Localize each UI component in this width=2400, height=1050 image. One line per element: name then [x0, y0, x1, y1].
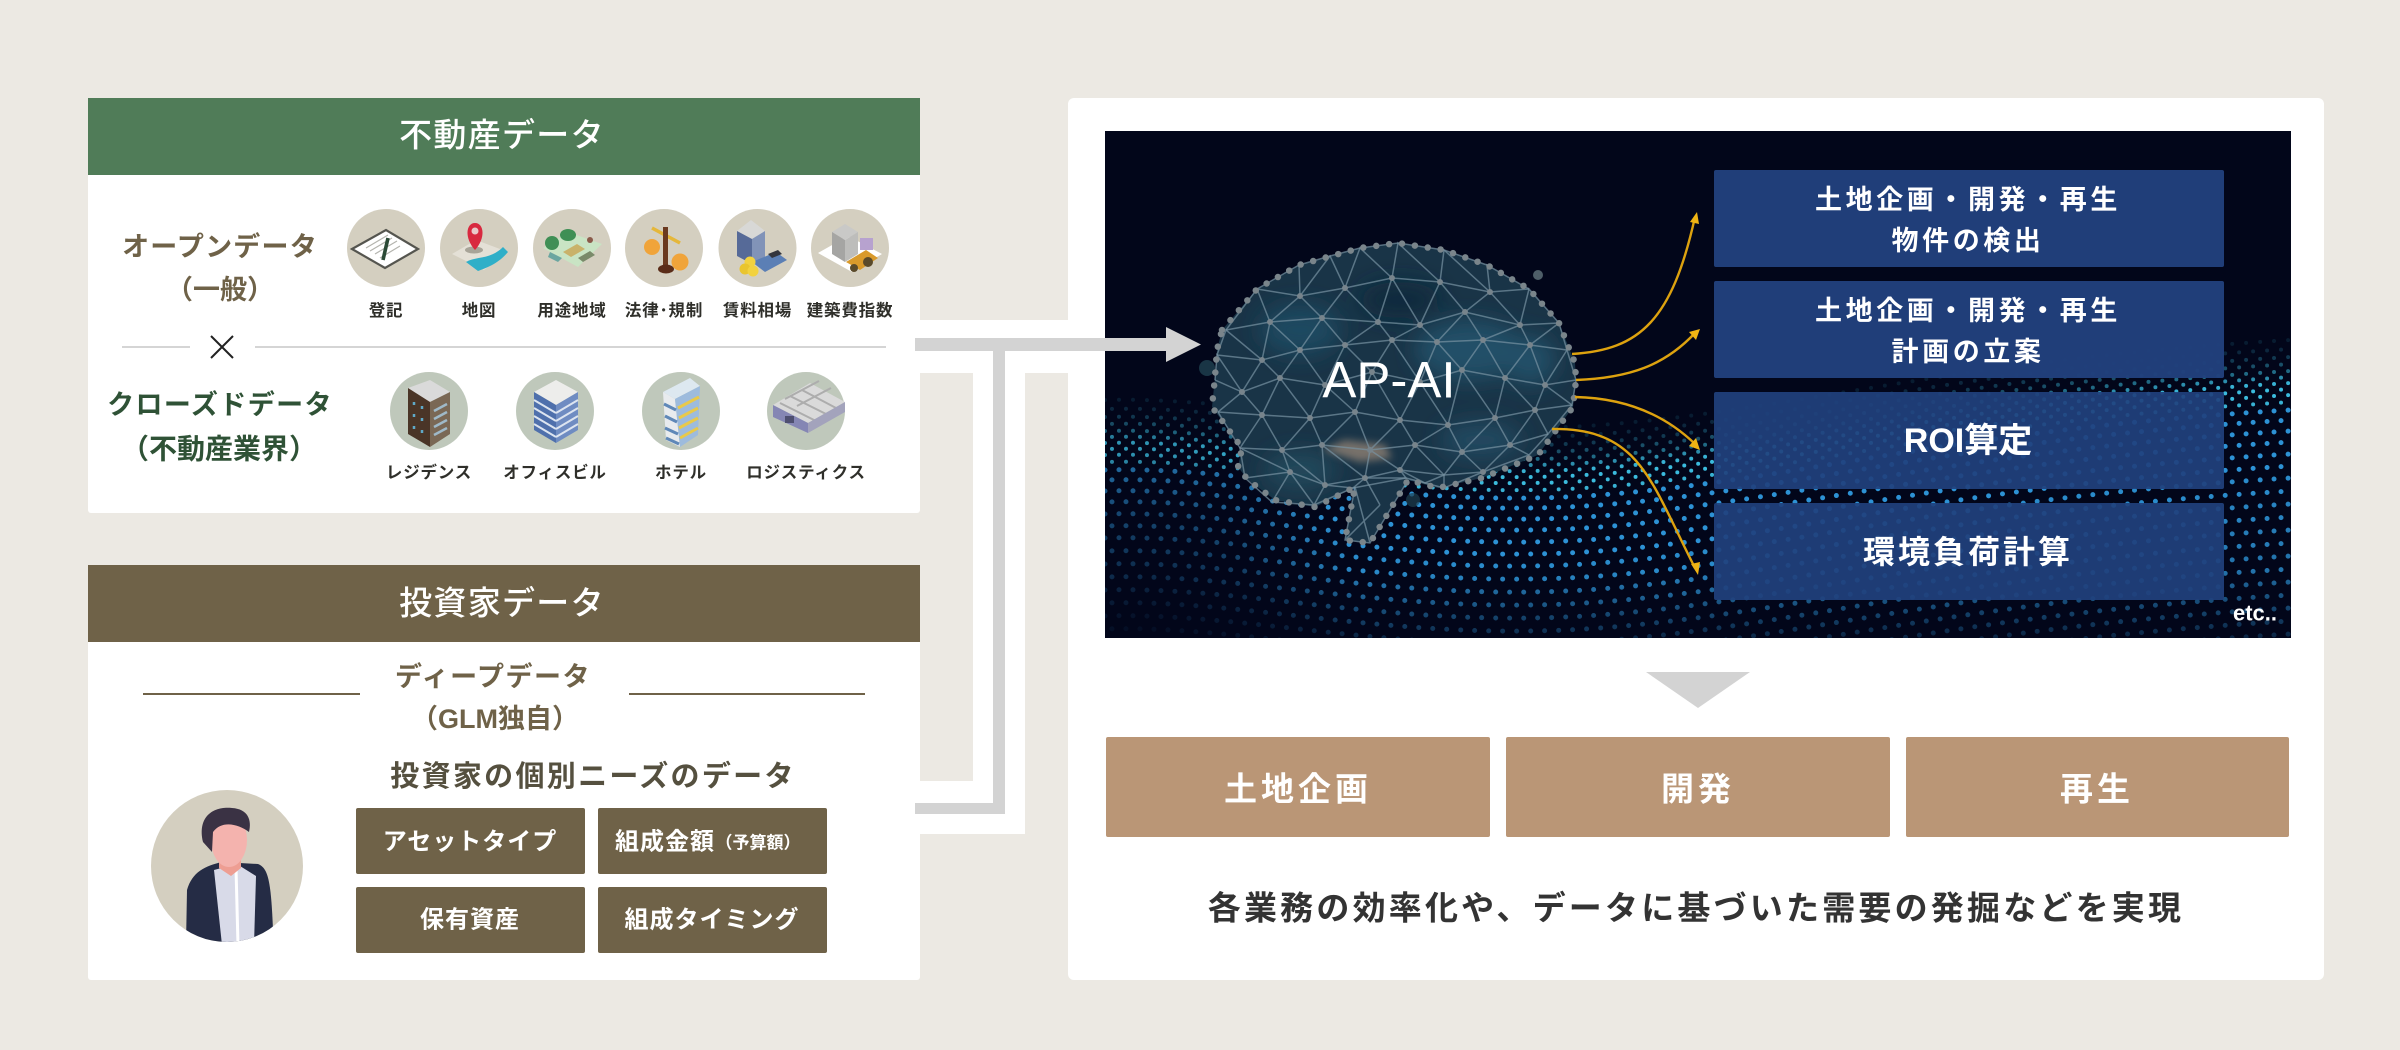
tag: timing: 組成タイミング: [624, 906, 800, 934]
subheading: individual needs: 投資家の個別ニーズのデータ: [390, 759, 796, 793]
deep data label: [143, 661, 865, 734]
output box: site detection: 物件の検出: [1892, 226, 2044, 256]
output box: planning: [1714, 281, 2224, 378]
tag: held assets: 保有資産: [420, 906, 520, 934]
deep data label: （GLM独自）: [411, 704, 579, 734]
deep data label: ディープデータ: [395, 661, 591, 692]
tag: budget: [598, 808, 827, 874]
icon: hotel: [642, 372, 720, 450]
output box: environmental load: 環境負荷計算: [1863, 534, 2073, 570]
label: rent market: 賃料相場: [723, 301, 792, 320]
heading: investor data: 投資家データ: [399, 584, 605, 622]
etc note: etc..: [2233, 600, 2277, 626]
open data label: オープンデータ: [122, 231, 318, 262]
tag: timing: [598, 887, 827, 953]
label: law and regulation: 法律･規制: [625, 301, 703, 320]
panel: real estate data: [88, 98, 920, 513]
label: registry: 登記: [369, 301, 403, 320]
label: logistics: ロジスティクス: [746, 463, 866, 482]
result box: regeneration: 再生: [2060, 770, 2134, 808]
output box: site detection: 土地企画・開発・再生: [1815, 185, 2121, 215]
heading: real estate data: [88, 98, 920, 175]
label: residence: レジデンス: [386, 462, 472, 482]
result box: land planning: 土地企画: [1224, 770, 1372, 808]
output box: site detection: [1714, 170, 2224, 267]
panel: AI result: [1068, 98, 2324, 980]
label: construction cost index: 建築費指数: [807, 300, 893, 320]
label: office building: オフィスビル: [503, 462, 607, 482]
arrows: AI outputs: [1552, 212, 1700, 575]
brain label: AP-AI: [1322, 352, 1456, 408]
result box: development: [1506, 737, 1890, 837]
icon: AI brain: [1199, 243, 1576, 543]
label: zoning: 用途地域: [537, 301, 607, 320]
closed data label: [107, 389, 333, 464]
icon: rent market: [718, 209, 796, 287]
panel: investor data: [88, 565, 920, 980]
tag: asset type: アセットタイプ: [383, 828, 557, 856]
output box: planning: 土地企画・開発・再生: [1815, 296, 2121, 326]
icon: office building: [516, 372, 594, 450]
tag: asset type: [356, 808, 585, 874]
result box: regeneration: [1906, 737, 2289, 837]
icon: zoning: [533, 209, 611, 287]
tag: budget: （予算額）: [716, 832, 800, 852]
icon: law and regulation: [625, 209, 703, 287]
tag: held assets: [356, 887, 585, 953]
icon: map: [440, 209, 518, 287]
icon: construction cost index: [811, 209, 889, 287]
connector arrow: data to AI: [915, 320, 1201, 834]
AP-AI image: [1105, 131, 2291, 638]
tag: budget: 組成金額: [615, 828, 715, 856]
output box: environmental load: [1714, 503, 2224, 600]
result box: development: 開発: [1661, 770, 1735, 808]
icon: registry: [347, 209, 425, 287]
label: hotel: ホテル: [655, 463, 707, 482]
output box: ROI: ROI算定: [1904, 422, 2032, 460]
icon: logistics: [767, 372, 845, 450]
result box: land planning: [1106, 737, 1490, 837]
closed data label: （不動産業界）: [121, 434, 317, 464]
icon: investor avatar: [151, 790, 303, 945]
arrow: down: [1646, 672, 1750, 708]
output box: planning: 計画の立案: [1892, 337, 2044, 367]
closed data label: クローズドデータ: [107, 389, 333, 420]
open data label: （一般）: [166, 275, 274, 305]
icon: residence: [390, 372, 468, 450]
heading: real estate data: 不動産データ: [399, 116, 605, 154]
open data label: [122, 231, 318, 305]
label: map: 地図: [462, 301, 496, 320]
output box: ROI: [1714, 392, 2224, 489]
heading: investor data: [88, 565, 920, 642]
multiply divider: [122, 336, 886, 358]
conclusion text: 各業務の効率化や、データに基づいた需要の発掘などを実現: [1208, 890, 2184, 926]
